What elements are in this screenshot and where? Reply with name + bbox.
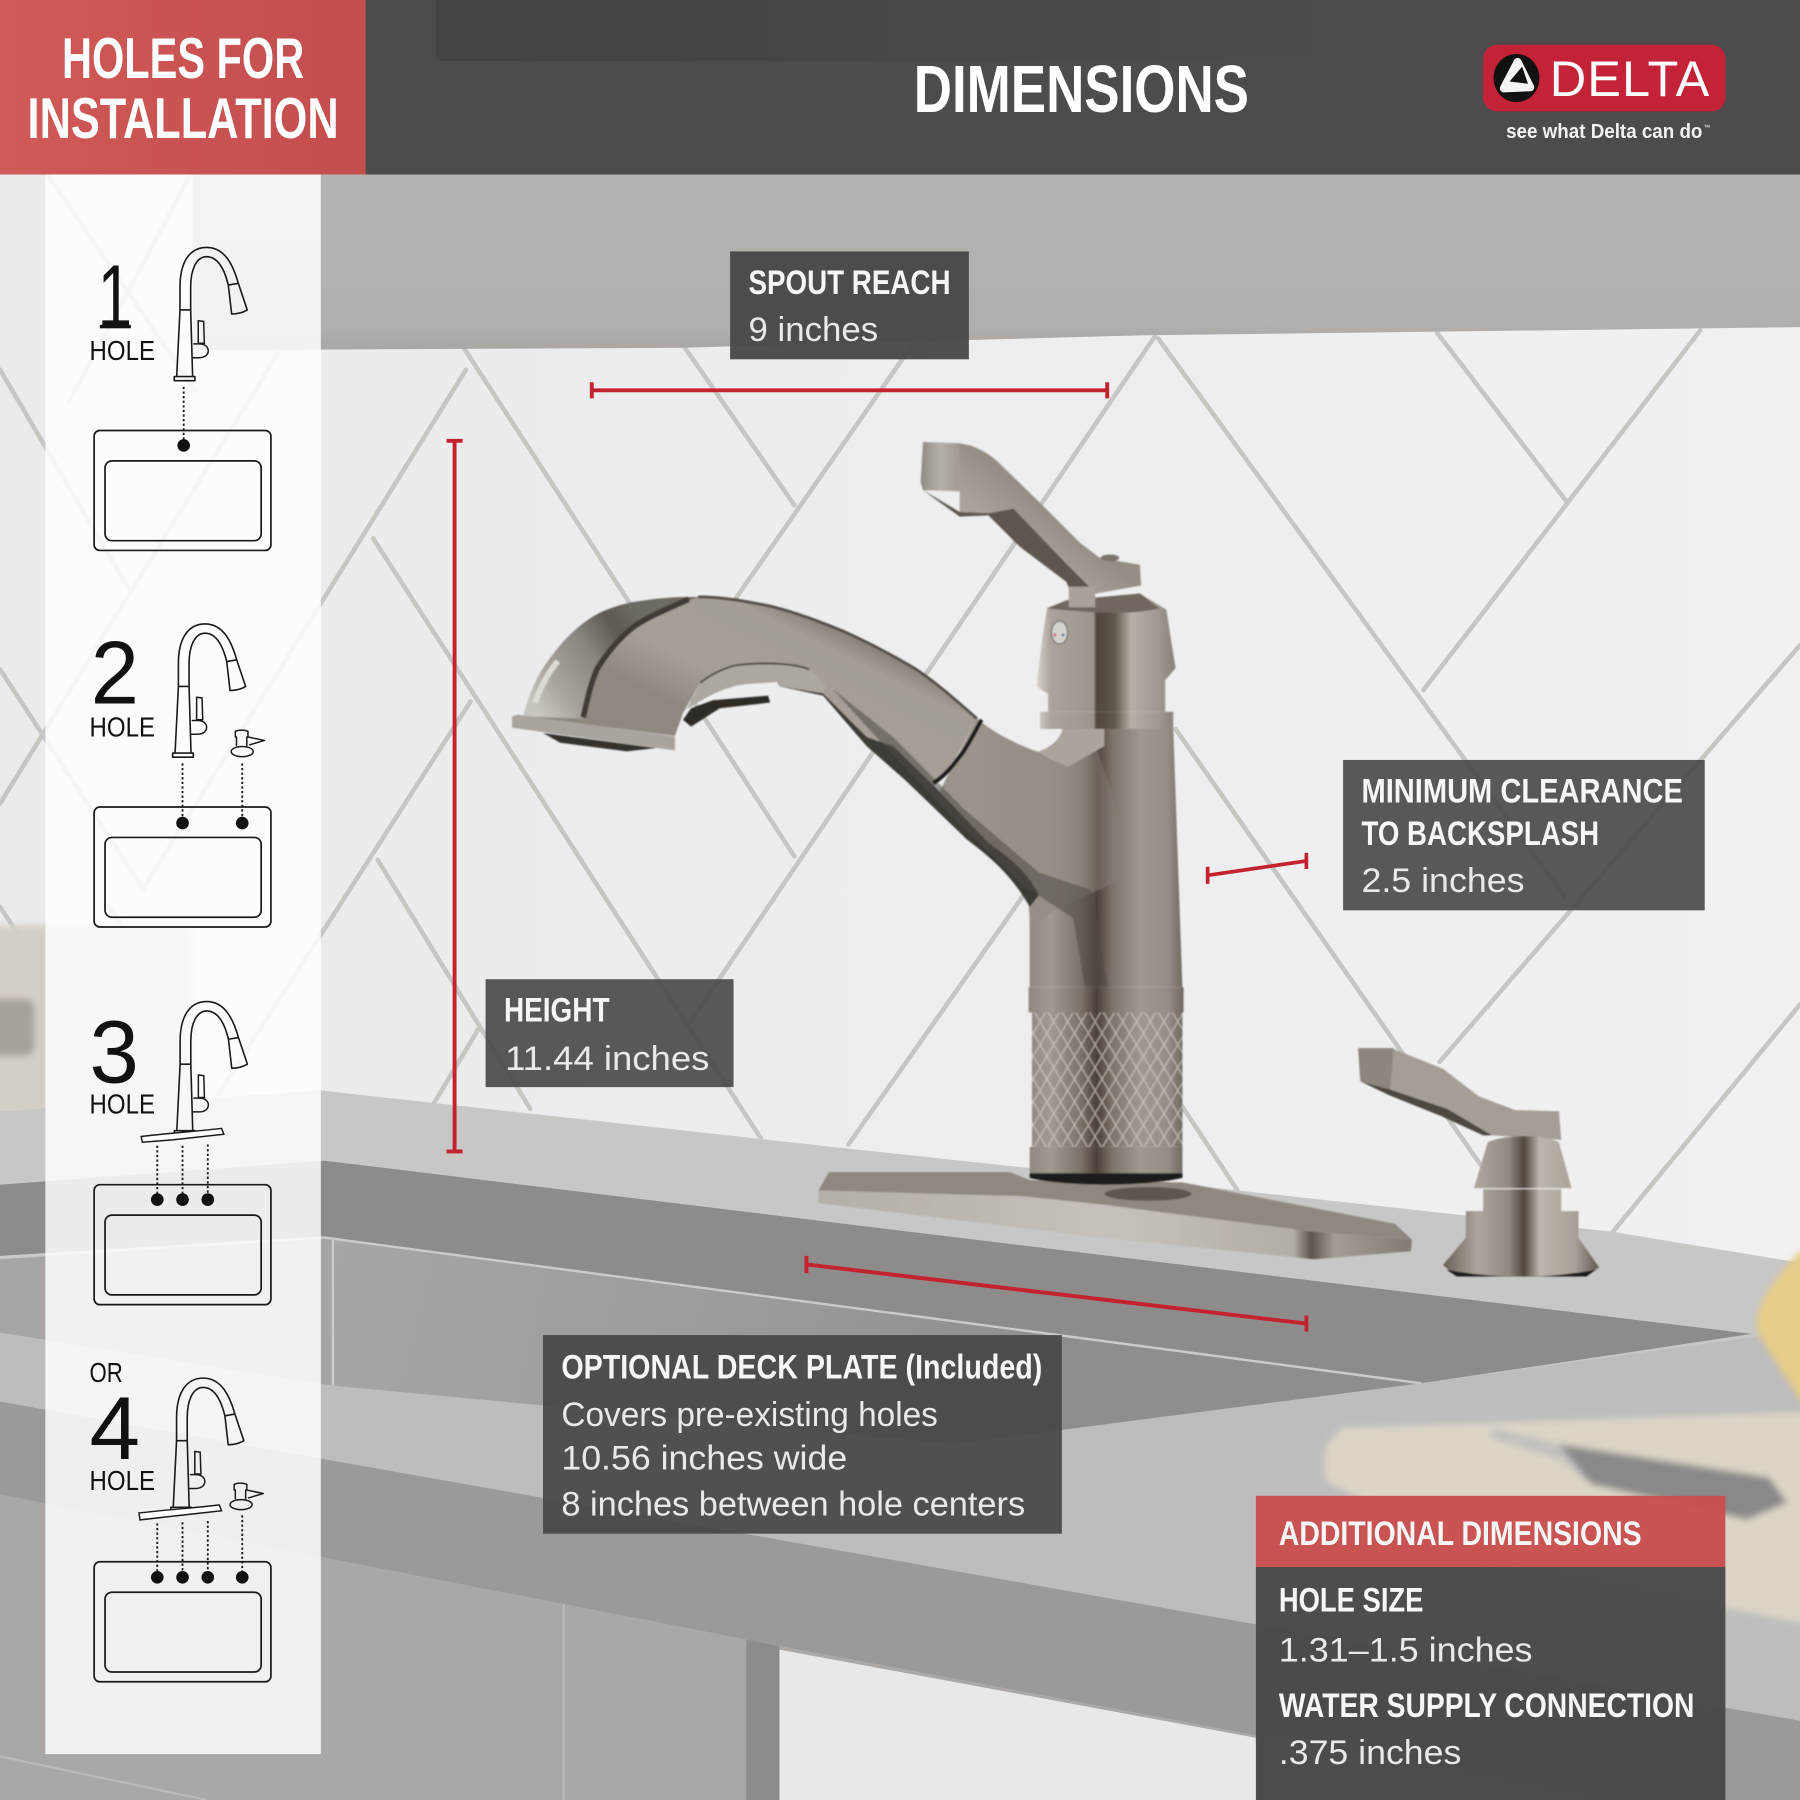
callout: spout reach — [730, 251, 969, 359]
header: holes for installation: HOLES FOR — [62, 27, 304, 91]
panel: additional dimensions — [1256, 1496, 1725, 1800]
option: 3 hole: 3 — [90, 1002, 139, 1102]
panel: additional dimensions: HOLE SIZE — [1279, 1582, 1423, 1620]
dimension line: spout reach — [592, 382, 1107, 398]
callout: height: HEIGHT — [504, 992, 610, 1030]
option: or 4 hole: OR — [90, 1357, 123, 1388]
logo: Delta: DELTA — [1550, 50, 1710, 107]
faucet collar and cap — [1037, 593, 1176, 729]
callout: spout reach: SPOUT REACH — [748, 264, 951, 302]
option: 2 hole — [90, 623, 271, 927]
option: 1 hole: HOLE — [90, 335, 155, 366]
background: wood shelf — [193, 174, 1800, 350]
callout: optional deck plate: Covers pre-existing holes — [561, 1396, 938, 1434]
callout: minimum clearance: 2.5 inches — [1361, 862, 1524, 900]
header: holes for installation — [0, 0, 366, 174]
deck plate — [818, 1172, 1412, 1259]
title: DIMENSIONS — [914, 53, 1249, 127]
option: or 4 hole — [90, 1357, 271, 1682]
callout: height: 11.44 inches — [505, 1040, 709, 1078]
background: cutting board, knife and lemon — [1325, 1246, 1800, 1630]
logo: Delta: see what Delta can do — [1506, 120, 1702, 143]
faucet lever handle — [921, 442, 1141, 607]
callout: optional deck plate — [543, 1335, 1062, 1534]
callout: optional deck plate: 8 inches between hole centers — [561, 1485, 1025, 1523]
callout: optional deck plate: 10.56 inches wide — [561, 1439, 847, 1477]
callout: minimum clearance: TO BACKSPLASH — [1361, 815, 1599, 853]
option: or 4 hole: 4 — [90, 1378, 140, 1478]
panel: additional dimensions: ADDITIONAL DIMENSIONS — [1279, 1515, 1642, 1553]
logo: Delta — [1483, 45, 1725, 143]
logo: Delta: ™ — [1704, 125, 1710, 132]
faucet knurled base — [1029, 987, 1184, 1185]
photo: soap dispenser — [1358, 1048, 1599, 1277]
panel: holes for installation — [45, 174, 321, 1754]
option: 1 hole — [90, 246, 271, 550]
callout: spout reach: 9 inches — [748, 311, 878, 349]
callout: height — [486, 979, 734, 1087]
callout: minimum clearance: MINIMUM CLEARANCE — [1361, 772, 1683, 810]
callout: minimum clearance — [1343, 760, 1705, 910]
callout: optional deck plate: OPTIONAL DECK PLATE (Included) — [561, 1349, 1042, 1387]
option: 3 hole: HOLE — [90, 1089, 155, 1120]
background: herringbone tile grout — [0, 172, 1800, 1232]
option: or 4 hole: HOLE — [90, 1465, 155, 1496]
photo: pull-out faucet — [512, 442, 1412, 1259]
header bar — [0, 0, 1800, 174]
option: 1 hole: 1 — [98, 246, 132, 346]
background: counter and sink — [0, 1091, 1800, 1800]
dimension line: deck plate — [806, 1256, 1306, 1332]
dimension line: height — [447, 441, 463, 1151]
panel: additional dimensions: .375 inches — [1279, 1734, 1461, 1772]
dimension line: minimum clearance — [1208, 853, 1306, 884]
faucet body and spout — [512, 597, 1182, 987]
header: holes for installation: INSTALLATION — [28, 87, 339, 151]
panel: additional dimensions: 1.31–1.5 inches — [1279, 1632, 1533, 1670]
panel: additional dimensions: WATER SUPPLY CONNECTION — [1279, 1687, 1694, 1725]
background: blurred beige object — [0, 925, 192, 1115]
option: 2 hole: 2 — [91, 623, 139, 723]
option: 3 hole — [90, 1002, 271, 1305]
option: 2 hole: HOLE — [90, 711, 155, 742]
